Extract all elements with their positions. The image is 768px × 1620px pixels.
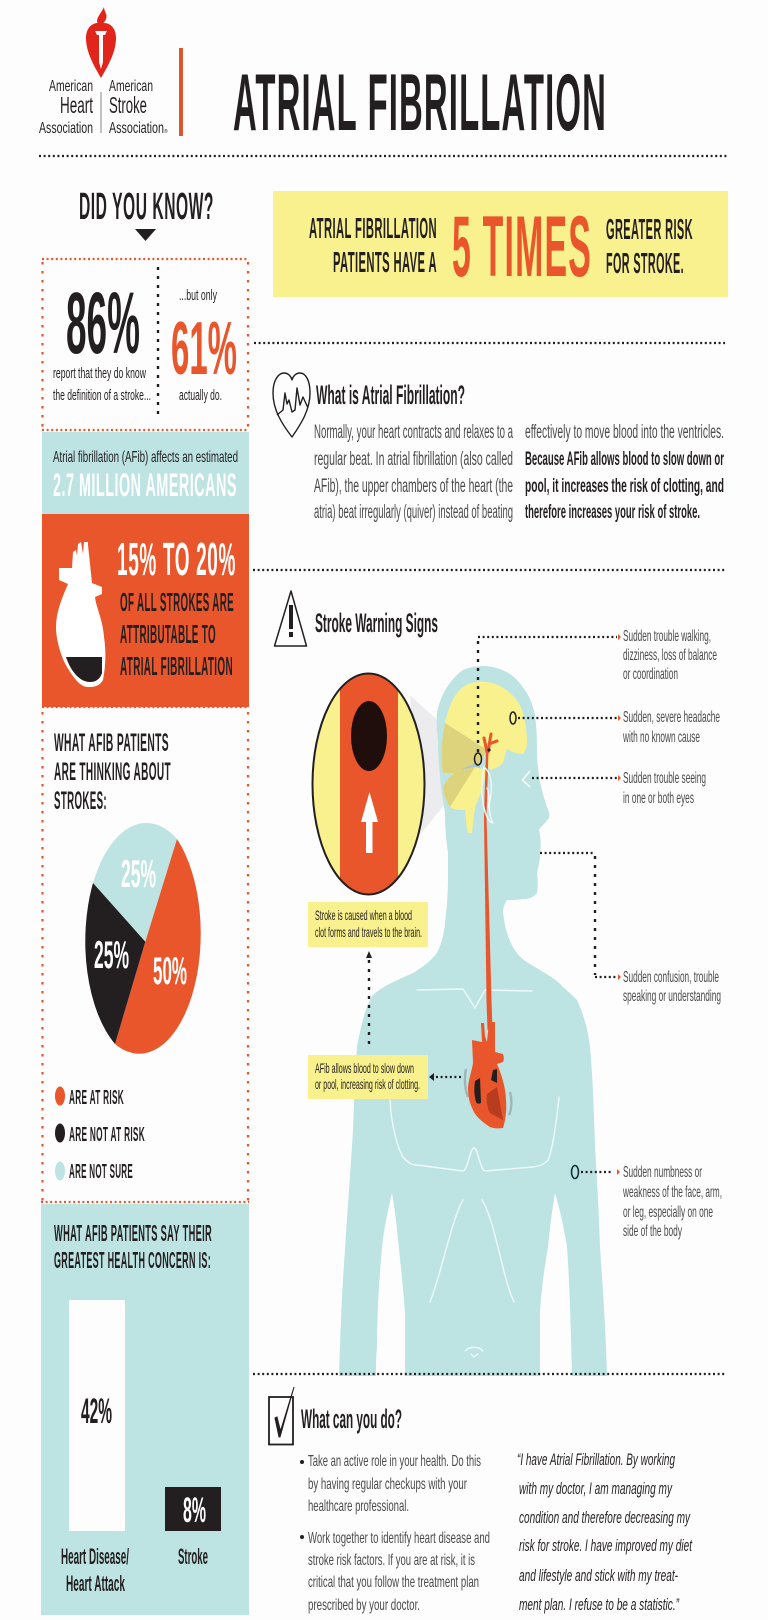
body contour lines <box>390 989 559 1357</box>
section: what can you do <box>269 1387 693 1614</box>
icon: heart with pooled blood <box>56 542 105 687</box>
illustration: ear outline <box>482 767 493 823</box>
panel: what AFib patients think about strokes: WHAT AFIB PATIENTS <box>54 729 169 757</box>
logo: American Heart Association / American Stroke Association <box>39 7 168 137</box>
text: GREATEST HEALTH CONCERN IS: <box>54 1247 211 1273</box>
section: what can you do: What can you do? <box>301 1404 402 1434</box>
text block: left column: Normally, your heart contracts and relaxes to a <box>314 422 513 443</box>
heading: thinking about strokes: STROKES: <box>54 787 107 815</box>
warning sign: severe headache: with no known cause <box>622 729 700 746</box>
warning sign: trouble walking: or coordination <box>623 666 678 683</box>
panel: greatest health concern bar chart: Stroke <box>178 1544 208 1569</box>
text block: left column: regular beat. In atrial fibrillation (also called <box>314 449 513 470</box>
section: stroke warning signs: Stroke Warning Signs <box>315 608 438 638</box>
logo: American Heart Association / American Stroke Association: Association <box>109 120 164 137</box>
bar: heart disease 42%: 42% <box>81 1392 112 1431</box>
callout: AFib pooling: AFib allows blood to slow down <box>315 1060 414 1076</box>
illustration: human body silhouette <box>339 666 607 1376</box>
heading: did you know <box>79 186 214 241</box>
bullet: risk factors <box>300 1530 490 1614</box>
heading: greatest health concern <box>54 1220 212 1273</box>
zoom wedge <box>410 695 480 835</box>
text: ATRIAL FIBRILLATION <box>120 651 233 681</box>
bullet: risk factors: critical that you follow the treatment plan <box>308 1574 479 1591</box>
bar labels <box>61 1544 208 1596</box>
blood clot <box>351 701 387 771</box>
bar: heart disease 42% <box>69 1300 125 1531</box>
warning sign: trouble seeing: in one or both eyes <box>623 790 694 807</box>
logo divider bar <box>179 48 183 136</box>
callout: stroke cause: Stroke is caused when a blood <box>315 907 412 923</box>
panel: stroke definition stats: 86% <box>66 275 140 372</box>
text: actually do: actually do. <box>179 387 222 404</box>
bullet: risk factors: stroke risk factors. If you are at risk, it is <box>308 1552 475 1569</box>
illustration: artery from heart to brain <box>484 734 497 1030</box>
text: but only: ...but only <box>179 287 217 304</box>
pie chart: 50% <box>153 950 187 993</box>
pie chart <box>85 823 201 1054</box>
text: 15% TO 20% <box>117 533 236 585</box>
logo: American Heart Association / American Stroke Association: American <box>49 78 93 95</box>
bullet: active role: Take an active role in your health. Do this <box>308 1453 481 1470</box>
logo: American Heart Association / American Stroke Association: ® <box>164 128 168 135</box>
warning sign: trouble walking <box>474 628 717 765</box>
panel: greatest health concern bar chart <box>41 1204 249 1615</box>
text block: right column <box>525 422 724 523</box>
warning sign: trouble seeing <box>522 770 706 807</box>
arrow: callout up to stroke cause <box>366 951 372 1048</box>
callout: stroke cause <box>308 902 428 947</box>
patient quote <box>517 1450 693 1614</box>
heading: thinking about strokes <box>54 729 171 815</box>
stat caption: 86%: the definition of a stroke... <box>53 387 151 404</box>
arrow: upward flow <box>361 792 378 853</box>
text block: left column <box>314 422 513 523</box>
callout: AFib pooling: or pool, increasing risk of clotting. <box>315 1076 420 1092</box>
bullet: active role: healthcare professional. <box>308 1498 409 1515</box>
illustration: heart <box>465 1022 511 1128</box>
bullet: risk factors: Work together to identify heart disease and <box>308 1530 490 1547</box>
section: what is atrial fibrillation: What is Atrial Fibrillation? <box>316 380 465 410</box>
bar labels: Heart Attack <box>66 1571 125 1596</box>
warning sign: numbness <box>572 1164 722 1240</box>
panel: 2.7 million Americans: Atrial fibrillation (AFib) affects an estimated <box>53 449 238 466</box>
panel: yellow banner 5 times risk: ATRIAL FIBRILLATION <box>309 213 437 245</box>
panel: 15% to 20% of strokes <box>42 514 249 707</box>
illustration: brain <box>442 682 527 833</box>
bar labels: Heart Disease/ <box>61 1544 129 1569</box>
panel: yellow banner 5 times risk <box>273 191 728 297</box>
panel: 2.7 million Americans <box>42 432 249 514</box>
bullet: active role <box>300 1453 481 1515</box>
panel: what AFib patients think about strokes: ARE NOT SURE <box>69 1161 133 1183</box>
text: DID YOU KNOW? <box>79 186 214 228</box>
section: stroke warning signs <box>274 591 722 1376</box>
magnified artery circle with clot <box>312 670 424 900</box>
stat caption: 86%: report that they do know <box>53 365 146 382</box>
text: WHAT AFIB PATIENTS SAY THEIR <box>54 1220 212 1246</box>
warning sign: confusion <box>540 853 721 1005</box>
stat caption: 86% <box>53 365 151 404</box>
pie chart: 25% <box>94 934 129 977</box>
bar: stroke 8% <box>165 1487 221 1531</box>
bullet: active role: by having regular checkups with your <box>308 1476 467 1493</box>
panel: what AFib patients think about strokes <box>41 707 249 1202</box>
legend: ARE AT RISK <box>69 1087 124 1109</box>
panel: stroke definition stats: 61% <box>171 306 237 390</box>
text block: left column: AFib), the upper chambers of the heart (the <box>314 476 513 497</box>
legend <box>55 1086 145 1183</box>
panel: stroke definition stats <box>42 259 249 430</box>
callout: AFib pooling <box>308 1055 428 1099</box>
section: what is atrial fibrillation: atria) beat irregularly (quiver) instead of beating <box>314 502 513 523</box>
logo: American Heart Association / American Stroke Association: Stroke <box>109 92 147 118</box>
bar: stroke 8%: 8% <box>183 1491 206 1530</box>
panel: yellow banner 5 times risk: PATIENTS HAVE A <box>333 247 437 279</box>
pie chart: 25% <box>121 853 156 896</box>
panel: what AFib patients think about strokes: ARE NOT AT RISK <box>69 1124 145 1146</box>
icon: checkbox <box>269 1387 294 1444</box>
logo: American Heart Association / American Stroke Association: Heart <box>60 92 93 118</box>
arrow: heart to AFib callout <box>429 1073 463 1081</box>
callout: stroke cause: clot forms and travels to the brain. <box>315 924 422 940</box>
warning sign: severe headache <box>510 709 720 746</box>
panel: what AFib patients think about strokes: ARE THINKING ABOUT <box>54 758 171 786</box>
logo: American Heart Association / American Stroke Association: Association <box>39 120 93 137</box>
warning sign: numbness: side of the body <box>623 1223 682 1240</box>
panel: 15% to 20% of strokes: ATTRIBUTABLE TO <box>120 619 216 649</box>
logo: American Heart Association / American Stroke Association: American <box>109 78 153 95</box>
icon: warning triangle <box>274 591 306 646</box>
text: OF ALL STROKES ARE <box>120 587 234 617</box>
icon: heart with ECG <box>273 373 310 437</box>
bullet: risk factors: prescribed by your doctor. <box>308 1597 420 1614</box>
section: what is atrial fibrillation <box>273 373 724 523</box>
text: 2.7 MILLION AMERICANS <box>53 467 237 503</box>
